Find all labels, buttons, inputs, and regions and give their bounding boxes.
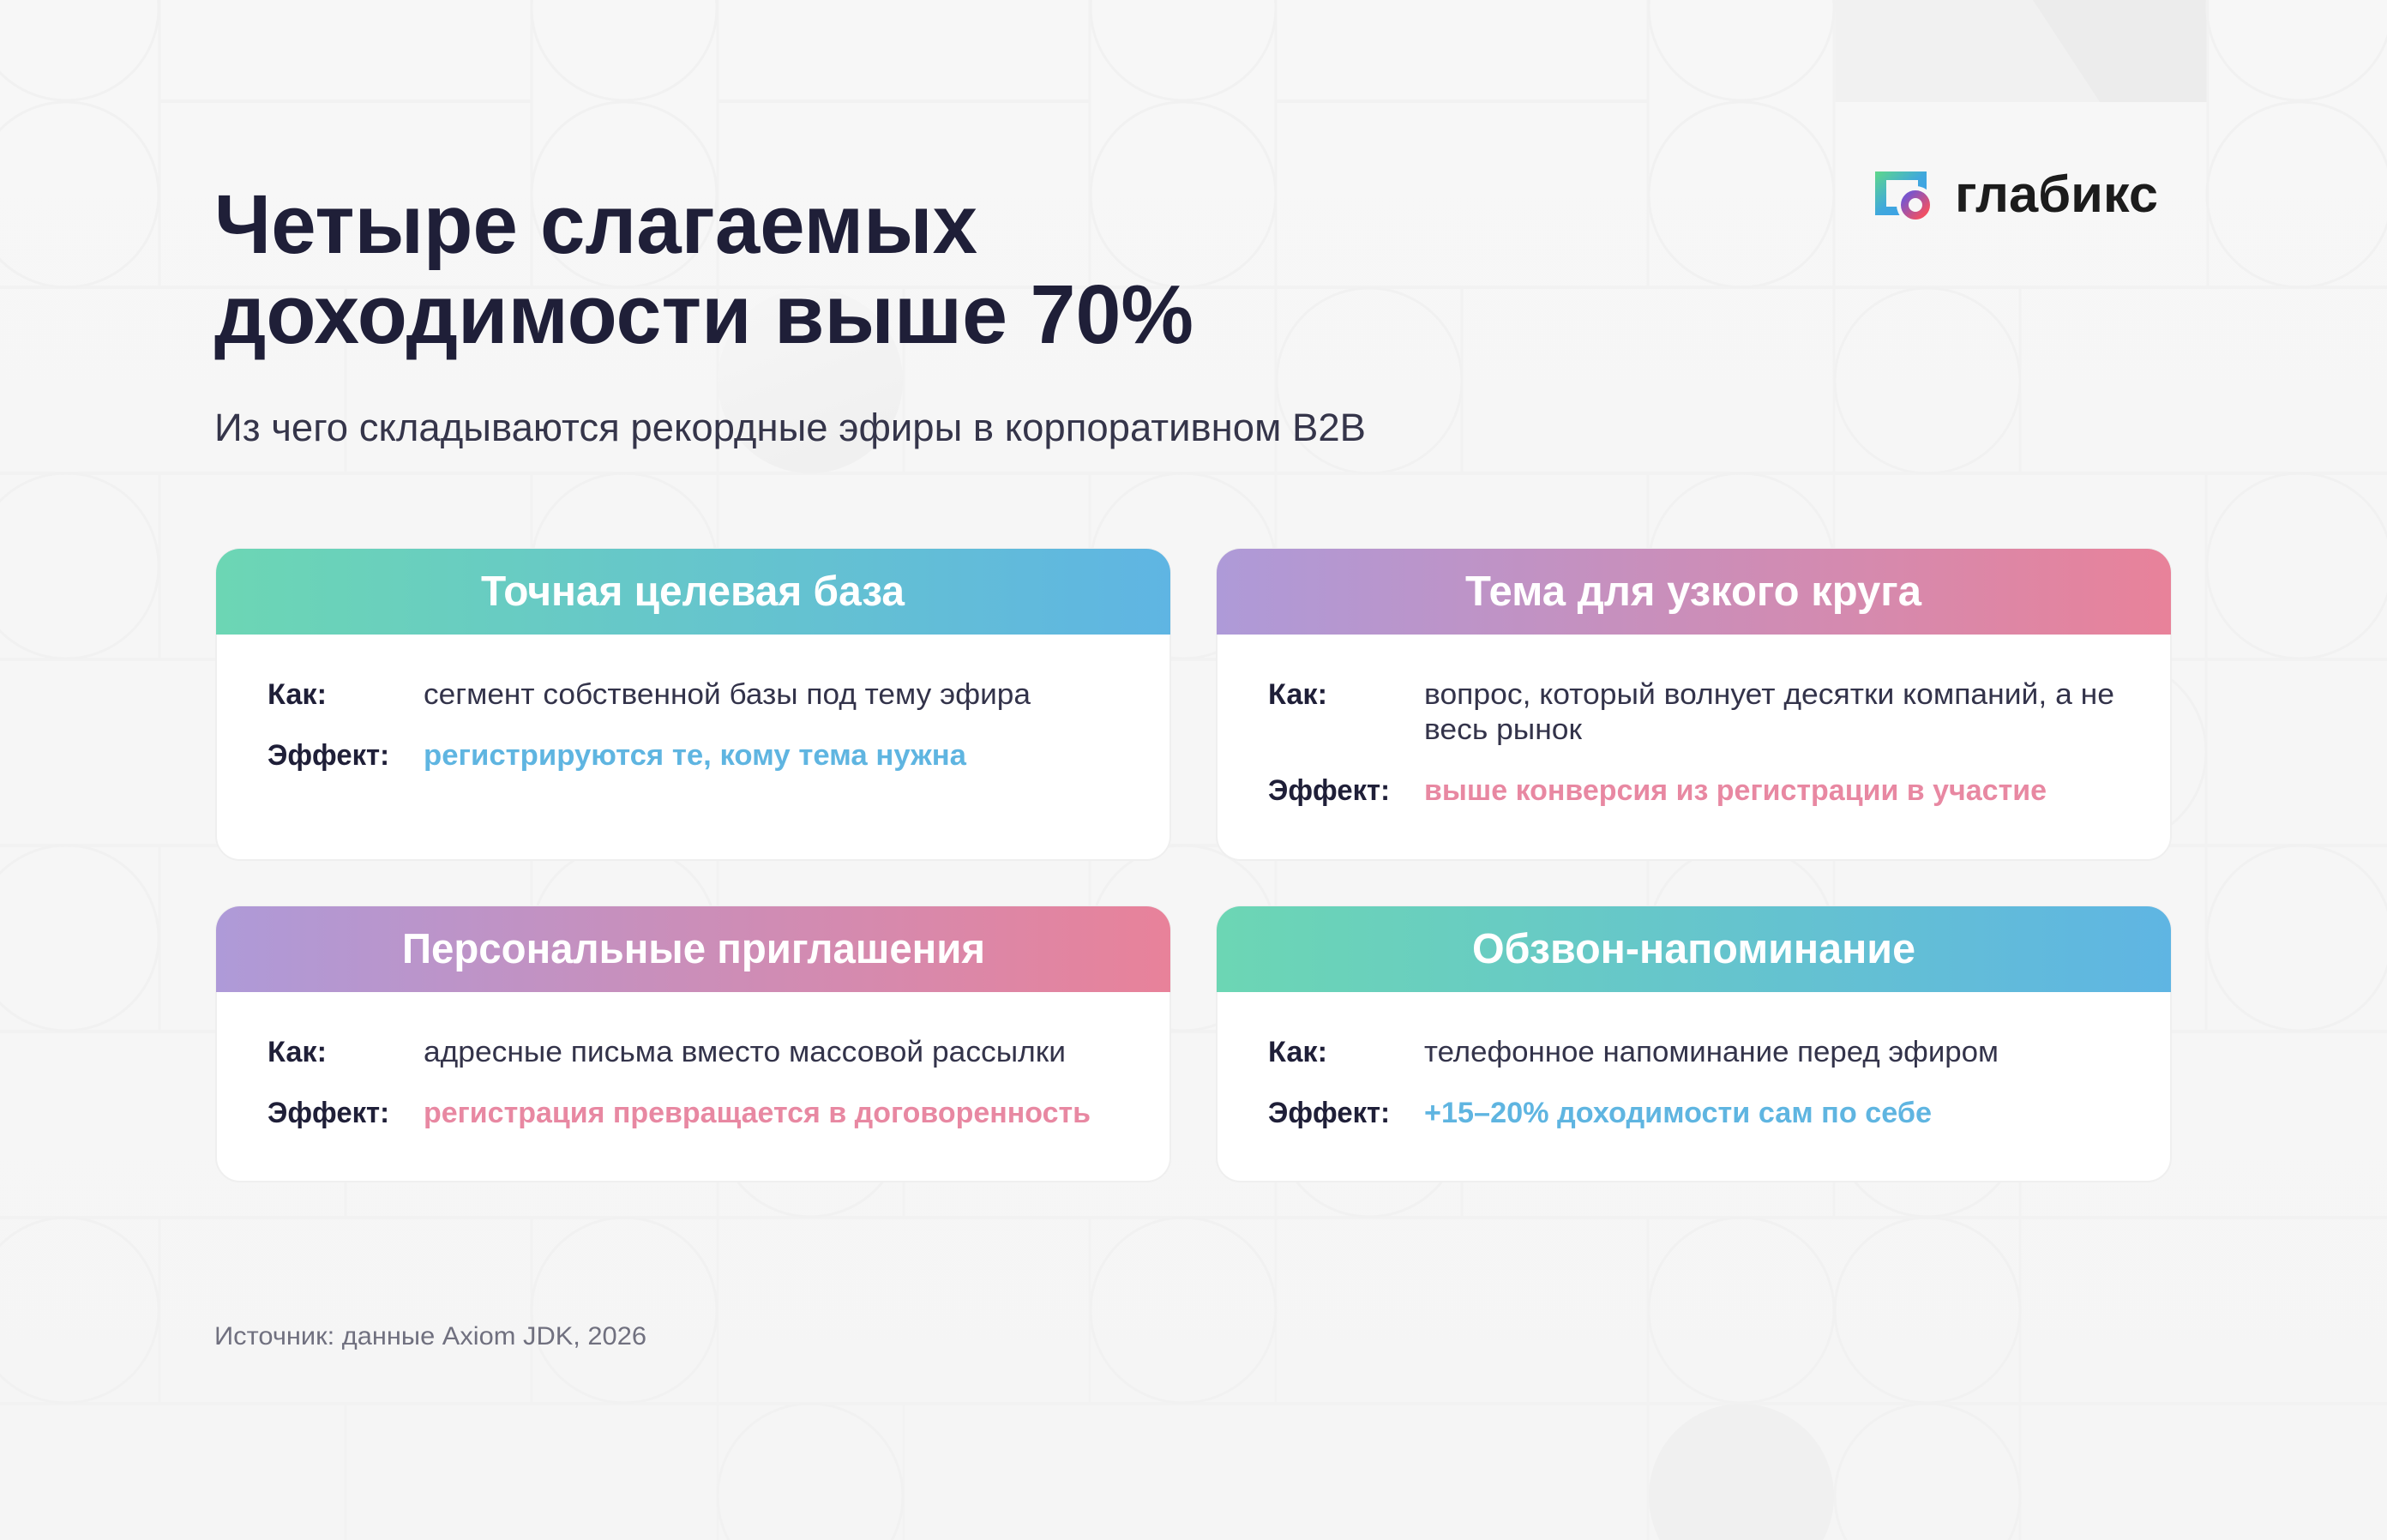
icon: logo mark bbox=[1875, 171, 1934, 224]
effect text: регистрируются те, кому тема нужна bbox=[424, 739, 967, 772]
card heading: Тема для узкого круга bbox=[1465, 568, 1922, 615]
label: how: Как: bbox=[1268, 678, 1327, 711]
label: effect: Эффект: bbox=[1268, 774, 1390, 807]
effect text: регистрация превращается в договоренность bbox=[424, 1097, 1091, 1129]
how text: вопрос, который волнует десятки компаний, а не bbox=[1424, 678, 2114, 711]
effect text: +15–20% доходимости сам по себе bbox=[1424, 1097, 1932, 1129]
logo wordmark: глабикс bbox=[1955, 165, 2158, 223]
how text: сегмент собственной базы под тему эфира bbox=[424, 678, 1031, 711]
title: доходимости выше 70% bbox=[214, 268, 1194, 361]
label: effect: Эффект: bbox=[268, 1097, 389, 1129]
effect text: выше конверсия из регистрации в участие bbox=[1424, 774, 2047, 807]
how text: телефонное напоминание перед эфиром bbox=[1424, 1036, 1999, 1068]
panel: Точная целевая база bbox=[216, 549, 1170, 860]
label: how: Как: bbox=[1268, 1036, 1327, 1068]
title: Четыре слагаемых bbox=[214, 177, 977, 271]
label: how: Как: bbox=[268, 1036, 327, 1068]
panel: Персональные приглашения bbox=[216, 906, 1170, 1182]
logo: глабикс bbox=[1875, 165, 2158, 224]
subtitle: Из чего складываются рекордные эфиры в корпоративном B2B bbox=[214, 406, 1366, 449]
label: how: Как: bbox=[268, 678, 327, 711]
card header bbox=[216, 906, 1170, 992]
card heading: Обзвон-напоминание bbox=[1472, 926, 1915, 972]
label: effect: Эффект: bbox=[268, 739, 389, 772]
card heading: Точная целевая база bbox=[481, 568, 905, 615]
card heading: Персональные приглашения bbox=[402, 926, 985, 972]
panel: Обзвон-напоминание bbox=[1217, 906, 2171, 1182]
how text: адресные письма вместо массовой рассылки bbox=[424, 1036, 1066, 1068]
how text: весь рынок bbox=[1424, 713, 1583, 746]
card header bbox=[216, 549, 1170, 635]
panel: Тема для узкого круга bbox=[1217, 549, 2171, 860]
source note: Источник: данные Axiom JDK, 2026 bbox=[214, 1322, 646, 1351]
label: effect: Эффект: bbox=[1268, 1097, 1390, 1129]
card header bbox=[1217, 549, 2171, 635]
card header bbox=[1217, 906, 2171, 992]
how text bbox=[1424, 678, 2114, 746]
title bbox=[214, 177, 1194, 361]
